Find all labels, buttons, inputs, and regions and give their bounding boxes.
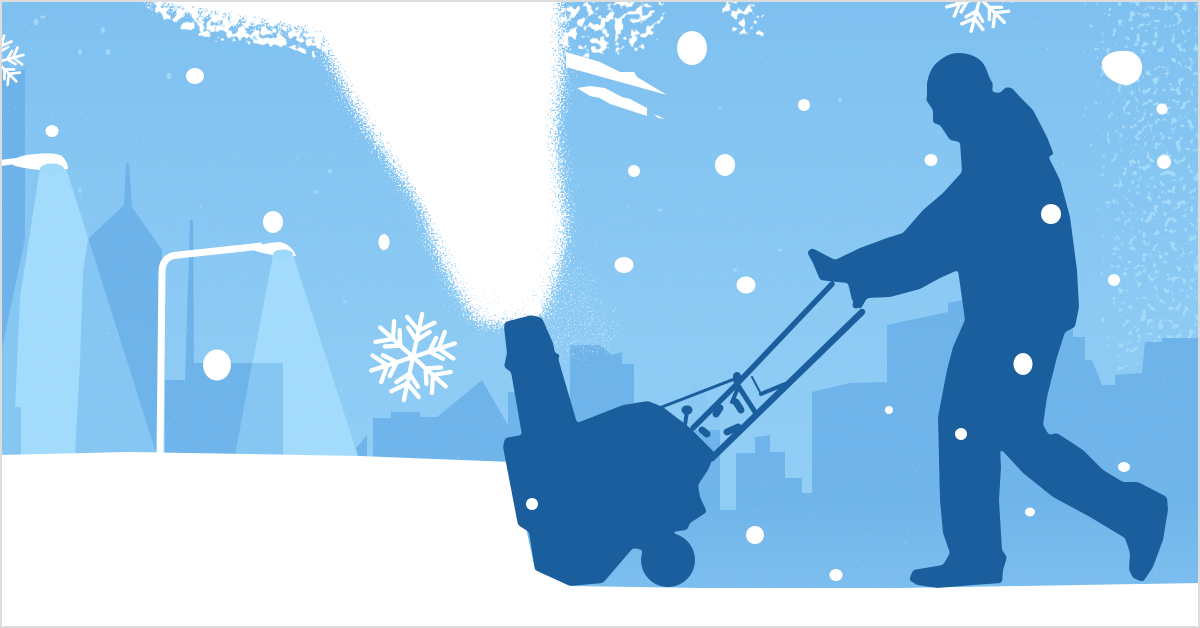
snowflake: large centre [360, 305, 466, 409]
snowflake: top right [937, 0, 1023, 40]
street lamp light beam: right [235, 255, 358, 456]
solid core of the spray [150, 0, 552, 295]
handle bars and linkage [662, 284, 862, 458]
drifting pale snow specks [820, 0, 1200, 400]
snow-covered ground [0, 452, 1200, 628]
city skyline: centre and right [510, 300, 1200, 600]
light gap between buildings [720, 420, 736, 510]
distant tower behind handle [680, 383, 720, 430]
wind-blown snow streaks [566, 52, 667, 95]
fine grit around the nozzle [470, 240, 640, 375]
street lamp: left [0, 153, 68, 174]
machine body, chute and wheel [503, 315, 715, 587]
scattered faint flakes in the sky [34, 16, 842, 304]
city skyline: left [0, 70, 522, 462]
snow blower [503, 284, 862, 587]
spray edge blotches: top right [555, 0, 765, 62]
snowflake: top left corner [0, 28, 31, 96]
spray edge blotches: top left [125, 0, 330, 62]
street lamp: right with pole [160, 242, 296, 456]
man pushing the snow blower [807, 53, 1168, 588]
street lamp light beam: left [0, 168, 157, 456]
snow spray from chute [125, 0, 765, 375]
